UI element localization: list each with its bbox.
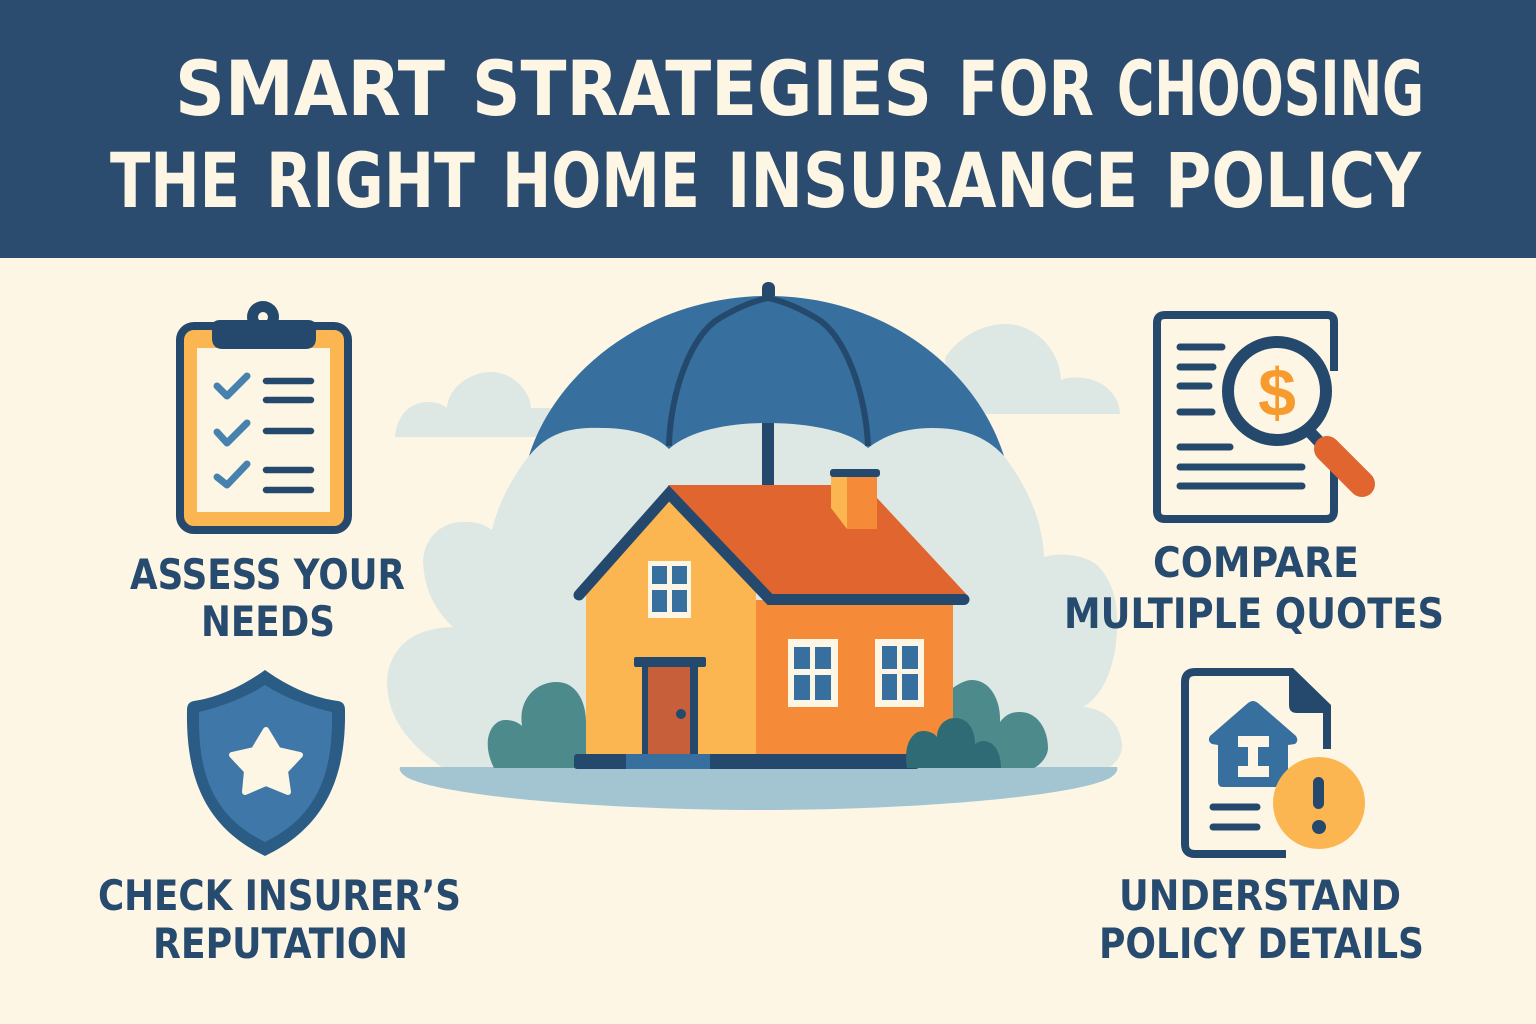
house side wall bbox=[756, 600, 953, 755]
label bbox=[130, 550, 405, 646]
illustration: house under umbrella bbox=[387, 282, 1122, 810]
label: MULTIPLE QUOTES bbox=[1064, 589, 1444, 638]
roof outline bbox=[579, 494, 964, 600]
umbrella bbox=[529, 282, 1004, 488]
label: CHECK INSURER’S bbox=[98, 871, 461, 920]
icon: document with magnifier bbox=[1157, 315, 1362, 519]
roof bbox=[668, 485, 968, 601]
title: STRATEGIES bbox=[472, 44, 932, 133]
attic window bbox=[648, 561, 691, 618]
icon: clipboard checklist bbox=[180, 301, 348, 530]
icon: shield with star bbox=[187, 670, 345, 856]
item: assess your needs bbox=[130, 301, 405, 646]
front bush bbox=[906, 718, 1001, 768]
side window right bbox=[875, 639, 924, 707]
label: NEEDS bbox=[201, 597, 335, 646]
bushes bbox=[488, 680, 1048, 768]
chimney bbox=[830, 469, 880, 529]
house front wall bbox=[586, 495, 756, 755]
title: INSURANCE bbox=[727, 136, 1138, 225]
title: HOME bbox=[502, 136, 700, 225]
label: ASSESS YOUR bbox=[130, 550, 405, 599]
header banner bbox=[0, 0, 1536, 258]
label: COMPARE bbox=[1153, 538, 1359, 587]
label: UNDERSTAND bbox=[1119, 871, 1401, 920]
icon: document with magnifier: $ bbox=[1258, 355, 1296, 431]
title: SMART bbox=[175, 44, 445, 133]
side window left bbox=[788, 639, 838, 707]
label: POLICY DETAILS bbox=[1099, 919, 1424, 968]
item: understand policy details bbox=[1099, 668, 1424, 968]
title: POLICY bbox=[1165, 136, 1422, 225]
title: RIGHT bbox=[266, 136, 475, 225]
foundation bbox=[574, 754, 919, 769]
label bbox=[98, 871, 461, 968]
label bbox=[1064, 538, 1444, 638]
item: compare multiple quotes bbox=[1064, 315, 1444, 638]
label: REPUTATION bbox=[153, 919, 408, 968]
icon: policy document with alert bbox=[1185, 668, 1365, 854]
item: check insurer's reputation bbox=[98, 670, 461, 968]
title: THE bbox=[110, 136, 240, 225]
door bbox=[634, 657, 706, 756]
title bbox=[110, 44, 1424, 225]
title: FOR bbox=[958, 44, 1094, 133]
ground ellipse bbox=[400, 767, 1117, 810]
background clouds bbox=[387, 324, 1122, 768]
house bbox=[574, 469, 968, 769]
label bbox=[1099, 871, 1424, 968]
